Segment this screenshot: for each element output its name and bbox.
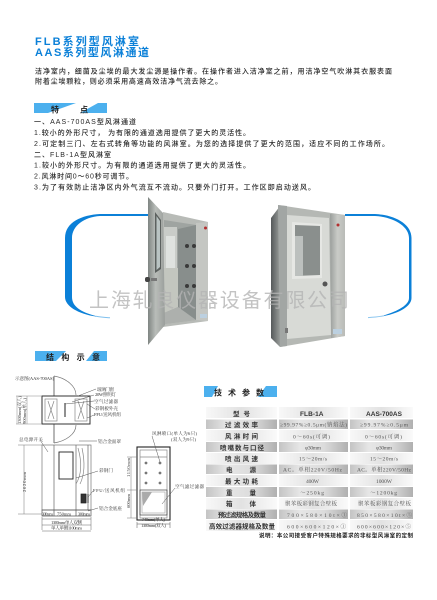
table first column labels: 高效过滤器规格及数量 [209,522,276,530]
table first column labels: 喷 出 风 速 [225,454,258,463]
table column FLB-1A: 0～60s(可调) [293,432,330,440]
structure diagram: front view: 2020mm [22,472,27,492]
table first column labels: 最 大 功 耗 [225,476,258,486]
features list [34,117,389,192]
structure diagram: side view: (双人为9只) [171,436,196,443]
title [35,34,149,59]
features list: 2.风淋时间0～60秒可调节。 [34,172,133,180]
structure diagram: plan view: 彩钢板外壳 [95,405,118,412]
structure diagram: plan view: FFU/送风机组 [94,411,121,418]
heading: technical parameters: 技术参数 [214,388,264,398]
structure diagram: front view [18,436,125,532]
table column FLB-1A: ～250kg [300,490,324,496]
table footnote: 说明：本公司接受客户特殊规格要求的非标型风淋室的定制 [259,532,413,540]
structure diagram: side view: 600mm [126,494,131,508]
structure diagram: plan view: 示意图(AAS-700AS) [15,375,54,382]
features list: 2.可定制三门、左右式转角等功能的风淋室。为您的选择提供了更大的范围，适应不同的工作场所。 [34,139,389,148]
heading: features [34,103,107,114]
structure diagram: front view: 彩钢门 [99,467,113,474]
structure diagram: side view: 1300mm(双人) [141,522,166,529]
structure diagram: side view: 空气滤过滤器 [175,483,204,490]
structure diagram: front view: 铝合金底座 [99,505,122,512]
structure diagram: side view: 740mm(单人) [142,516,165,523]
table first column labels: 过 滤 效 率 [225,420,258,429]
table column AAS-700AS: φ30mm [376,446,393,452]
heading: structure diagram [35,351,107,362]
table column AAS-700AS: 1000W [376,479,393,485]
structure diagram: plan view: 空气过滤器 [94,398,118,405]
table first column labels: 喷 嘴 数 与 口 径 [220,443,264,452]
table first column labels: 风 淋 时 间 [225,432,258,440]
heading: technical parameters [204,386,277,398]
table first column labels: 重 量 [226,488,256,497]
table column AAS-700AS: AAS-700AS [366,411,403,418]
structure diagram: plan view: 1300mm(双人) [16,396,23,424]
features list: 3.为了有效防止洁净区内外气流互不流动。只要外门打开。工作区即启动送风。 [34,182,315,192]
structure diagram: side view: 1150mm [126,458,131,477]
features list: 一、AAS-700AS型风淋通道 [34,117,136,126]
table column FLB-1A: 聚苯板彩钢复合壁板 [285,500,337,508]
structure diagram: front view: 单人单侧1100mm [51,524,82,532]
title: FLB系列型风淋室 [35,34,139,48]
structure diagram: front view: FFU/送风机组 [93,487,125,494]
table column FLB-1A: 700×580×10t×① [287,511,347,519]
table row backgrounds [206,407,413,531]
product photo: closed door shower [271,205,345,347]
table column FLB-1A: AC。单相220V/50Hz [283,466,343,474]
table column AAS-700AS: ≥99.97%≥0.5μm [360,422,409,428]
parameter table [206,407,413,531]
table column FLB-1A [280,411,347,530]
intro text block: 洁净室内，细菌及尘埃的最大发尘源是操作者。在操作者进入洁净室之前，用洁净空气吹淋其衣服表面 [35,66,392,76]
structure diagram: front view: 总电源开关 [19,436,43,443]
intro text block: 附着尘埃颗粒，则必须采用高速高效洁净气流去除之。 [35,76,222,86]
structure diagram: front view: 750mm [57,512,71,516]
table column AAS-700AS: 850×580×10t×⑤ [357,511,412,519]
table column FLB-1A: 400W [306,479,320,485]
table column FLB-1A: ≥99.97%≥0.5μm(钠焰法) [280,420,347,428]
table column FLB-1A: φ30mm [305,446,322,452]
table column AAS-700AS: 0～60s(可调) [365,432,402,440]
structure diagram: side view [126,430,204,529]
structure diagram: plan view [15,375,121,443]
table column AAS-700AS: 聚苯板彩钢复合壁板 [358,500,411,508]
table column AAS-700AS: AC。单相220V/50Hz [357,466,412,474]
title: AAS系列型风淋通道 [35,45,149,59]
table first column labels: 电 源 [226,465,256,474]
features list: 二、FLB-1A型风淋室 [34,150,111,159]
intro text block [35,66,392,86]
table first column labels: 型 号 [233,409,250,418]
table first column labels: 预过滤规格及数量 [218,510,266,519]
heading: features: 点 [80,104,88,114]
structure diagram: front view: 铝合金面罩 [98,438,121,445]
table column FLB-1A: FLB-1A [300,411,324,418]
structure diagram: plan view: 20W照明灯 [95,391,116,398]
blue rounded frame behind products [65,214,412,318]
table first column labels: 箱 体 [226,499,256,508]
table column FLB-1A: 15～20m/s [299,456,327,462]
structure diagram: front view: 300mm [42,512,53,516]
table column AAS-700AS: ～1200kg [370,490,397,496]
structure diagram: plan view: 玻璃门窗 [97,386,114,393]
table column FLB-1A: 600×600×120×① [287,522,346,530]
product photo: open door shower [145,197,208,345]
table column AAS-700AS: 15～20m/s [370,456,398,462]
table column AAS-700AS: 600×600×120×⑤ [357,522,411,530]
heading: structure diagram: 结构示意 [46,352,100,362]
table first column labels [209,409,276,530]
heading: features: 特 [51,104,59,114]
watermark company name: 上海轧良仪器设备有限公司 [89,289,349,312]
structure diagram: plan view: 900mm(单人) [21,398,28,424]
table column AAS-700AS [357,411,412,530]
features list: 1.较小的外形尺寸， 为有限的通道选用提供了更大的灵活性。 [34,128,250,137]
structure diagram: front view: 300mm [78,512,90,516]
structure diagram: front view: 1300mm单人双侧 [51,519,82,526]
features list: 1.较小的外形尺寸。为有限的通道选用提供了更大的灵活性。 [34,160,250,170]
structure diagram: side view: 风淋喷口(单人为6只) [152,430,197,437]
